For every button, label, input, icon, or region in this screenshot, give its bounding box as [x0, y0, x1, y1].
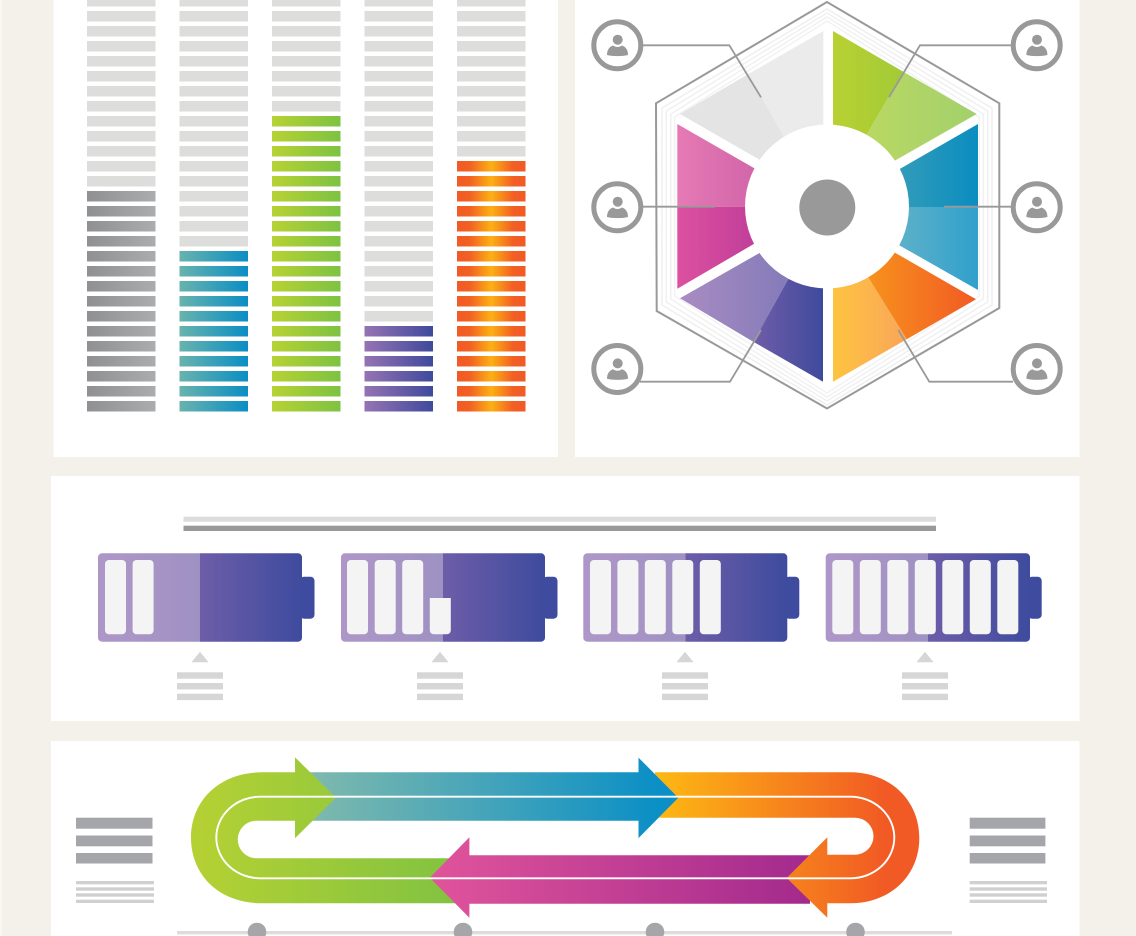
- icon: person top right: [1013, 22, 1060, 69]
- hexagon frame: [656, 2, 999, 408]
- battery label 4: [902, 652, 948, 700]
- icon: person middle right: [1013, 184, 1060, 231]
- column 2: teal level: [180, 0, 248, 412]
- column 1: gray level: [87, 0, 156, 412]
- battery 1: [98, 553, 314, 642]
- segment: purple: [680, 245, 823, 382]
- battery 3: [583, 553, 799, 642]
- segment: magenta: [677, 124, 775, 289]
- segment: blue: [880, 124, 978, 290]
- column 4: purple level: [364, 0, 433, 412]
- segment: green: [833, 31, 977, 170]
- battery label 1: [177, 652, 223, 700]
- left text block: [76, 818, 154, 903]
- segment: orange: [833, 245, 976, 382]
- timeline: [177, 923, 952, 936]
- segment: gray: [680, 31, 823, 170]
- arrow: green: [191, 757, 480, 903]
- column 3: green level: [272, 0, 340, 412]
- arrow: teal: [305, 758, 678, 838]
- battery 4: [826, 553, 1042, 642]
- center hub: [745, 124, 909, 288]
- icon: person middle left: [594, 184, 641, 231]
- right text block: [970, 818, 1047, 903]
- panel: batteries: [51, 476, 1080, 721]
- arrow: orange: [655, 772, 919, 918]
- battery label 3: [662, 652, 708, 700]
- bar chart: five stacked level columns: [87, 0, 526, 412]
- panel: segmented bar columns: [54, 0, 558, 457]
- heading placeholder bars: [184, 517, 936, 531]
- battery 2: [341, 553, 558, 642]
- arrow: blue head overlap: [638, 758, 678, 838]
- panel: looping arrows: [51, 741, 1080, 936]
- connector lines: [640, 45, 1013, 382]
- icon: person bottom left: [594, 346, 641, 392]
- loop centerline: [216, 797, 894, 878]
- battery label 2: [417, 652, 463, 700]
- panel: hexagon diagram: [575, 0, 1080, 457]
- column 5: orange level: [457, 0, 526, 412]
- arrow: magenta: [430, 837, 810, 918]
- icon: person bottom right: [1013, 346, 1060, 392]
- icon: person top left: [594, 22, 641, 69]
